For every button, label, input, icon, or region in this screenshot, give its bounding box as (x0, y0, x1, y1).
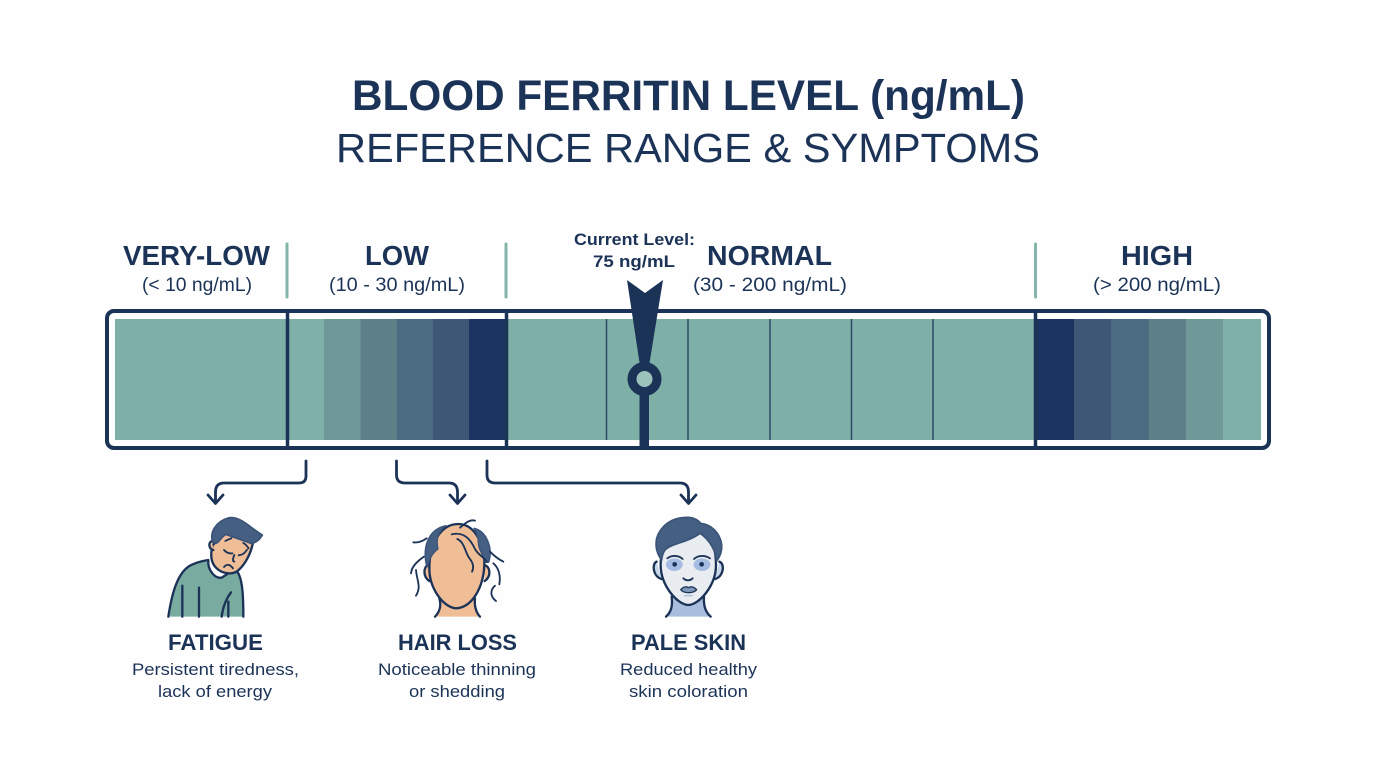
heading: low range: (10 - 30 ng/mL) (329, 275, 465, 296)
high segment gradient bands (1036, 319, 1261, 440)
caption: fatigue: lack of energy (158, 682, 273, 701)
current level label: 75 ng/mL (593, 253, 675, 271)
heading: normal range (693, 240, 847, 296)
normal segment (506, 319, 1036, 440)
caption: hair loss: Noticeable thinning (378, 660, 536, 679)
caption: hair loss (378, 630, 536, 701)
caption: pale skin: PALE SKIN (631, 630, 746, 655)
icon: pale skin face (654, 517, 723, 617)
caption: pale skin: skin coloration (629, 682, 748, 701)
caption: pale skin (620, 630, 758, 701)
title (336, 72, 1040, 171)
caption: fatigue (132, 630, 299, 701)
caption: pale skin: Reduced healthy (620, 660, 758, 679)
heading: normal range: NORMAL (707, 240, 832, 271)
current level label: Current Level: (574, 231, 695, 249)
caption: fatigue: FATIGUE (168, 630, 263, 655)
arrow: to hair loss (396, 461, 465, 504)
caption: hair loss: HAIR LOSS (398, 630, 517, 655)
heading: very-low range: (< 10 ng/mL) (142, 275, 252, 296)
heading: high range: HIGH (1121, 240, 1193, 271)
heading: very-low range: VERY-LOW (123, 240, 271, 271)
caption: fatigue: Persistent tiredness, (132, 660, 299, 679)
heading: normal range: (30 - 200 ng/mL) (693, 275, 847, 296)
heading: high range: (> 200 ng/mL) (1093, 275, 1221, 296)
icon: hair loss head (411, 520, 503, 617)
arrow: to pale skin (487, 461, 696, 504)
icon: fatigue person (168, 518, 262, 617)
current level label (574, 231, 695, 271)
heading: very-low range (123, 240, 271, 296)
low segment gradient bands (288, 319, 506, 440)
arrow: to fatigue (208, 461, 306, 504)
very-low segment (115, 319, 287, 440)
title: BLOOD FERRITIN LEVEL (ng/mL) (352, 72, 1025, 120)
caption: hair loss: or shedding (409, 682, 505, 701)
title: REFERENCE RANGE & SYMPTOMS (336, 125, 1040, 171)
heading: low range (329, 240, 465, 296)
current level marker (627, 280, 663, 450)
heading: high range (1093, 240, 1221, 296)
reference range bar (107, 310, 1269, 449)
heading: low range: LOW (365, 240, 430, 271)
